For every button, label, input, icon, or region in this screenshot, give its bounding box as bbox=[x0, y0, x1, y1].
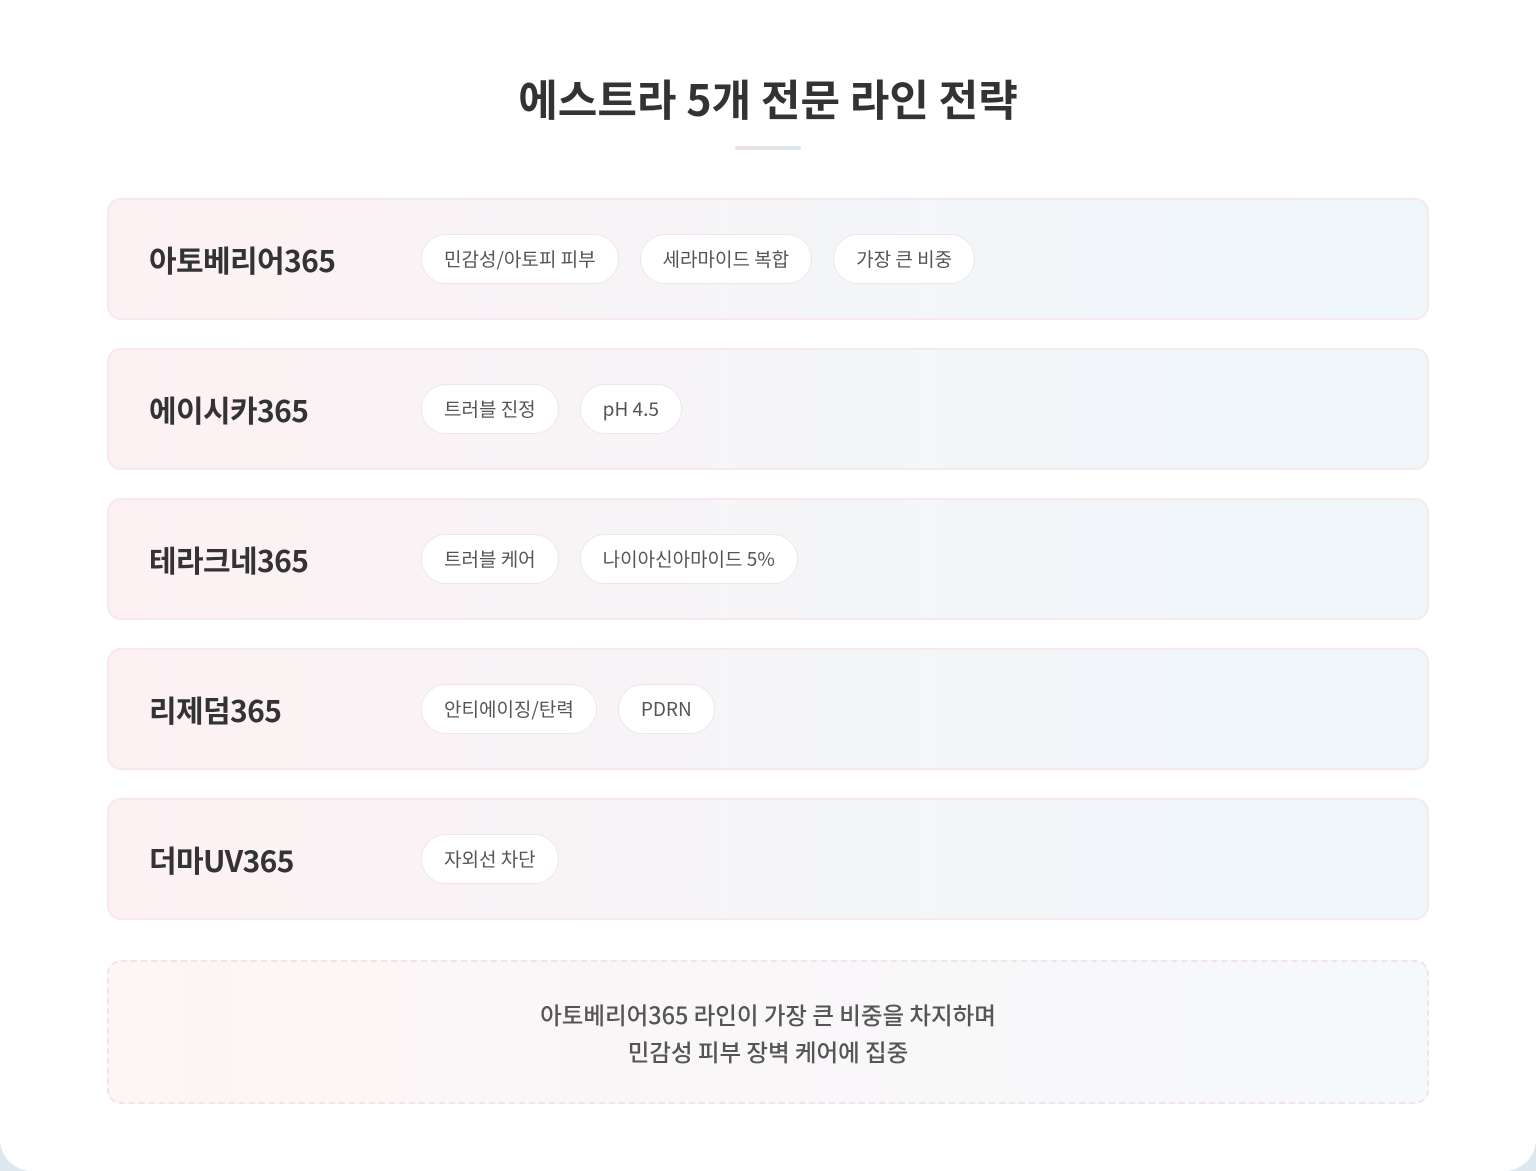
tags: 세라마이드 복합 bbox=[663, 245, 789, 272]
line name: 에이시카365 bbox=[149, 387, 308, 431]
tags bbox=[421, 234, 975, 284]
tags bbox=[421, 534, 798, 584]
tags: 안티에이징/탄력 bbox=[444, 695, 574, 722]
tags: 민감성/아토피 피부 bbox=[444, 245, 596, 272]
tags: 나이아신아마이드 5% bbox=[603, 545, 775, 572]
callout: summary bbox=[107, 960, 1429, 1104]
panel: 더마UV365 bbox=[107, 798, 1429, 920]
line name: 리제덤365 bbox=[149, 687, 281, 731]
tags bbox=[421, 684, 715, 734]
callout: summary: 아토베리어365 라인이 가장 큰 비중을 차지하며 bbox=[540, 997, 996, 1031]
tags: 트러블 케어 bbox=[444, 545, 536, 572]
panel: 리제덤365 bbox=[107, 648, 1429, 770]
tags: 자외선 차단 bbox=[444, 845, 536, 872]
callout: summary: 민감성 피부 장벽 케어에 집중 bbox=[628, 1034, 908, 1068]
line name: 테라크네365 bbox=[149, 537, 308, 581]
line name: 아토베리어365 bbox=[149, 237, 335, 281]
tags: PDRN bbox=[641, 695, 692, 722]
tags: pH 4.5 bbox=[603, 395, 659, 422]
panel: 아토베리어365 bbox=[107, 198, 1429, 320]
tags: 가장 큰 비중 bbox=[856, 245, 952, 272]
panel: 테라크네365 bbox=[107, 498, 1429, 620]
title: 에스트라 5개 전문 라인 전략 bbox=[518, 67, 1018, 129]
panel: 에이시카365 bbox=[107, 348, 1429, 470]
tags bbox=[421, 384, 682, 434]
tags: 트러블 진정 bbox=[444, 395, 536, 422]
line name: 더마UV365 bbox=[149, 837, 294, 881]
